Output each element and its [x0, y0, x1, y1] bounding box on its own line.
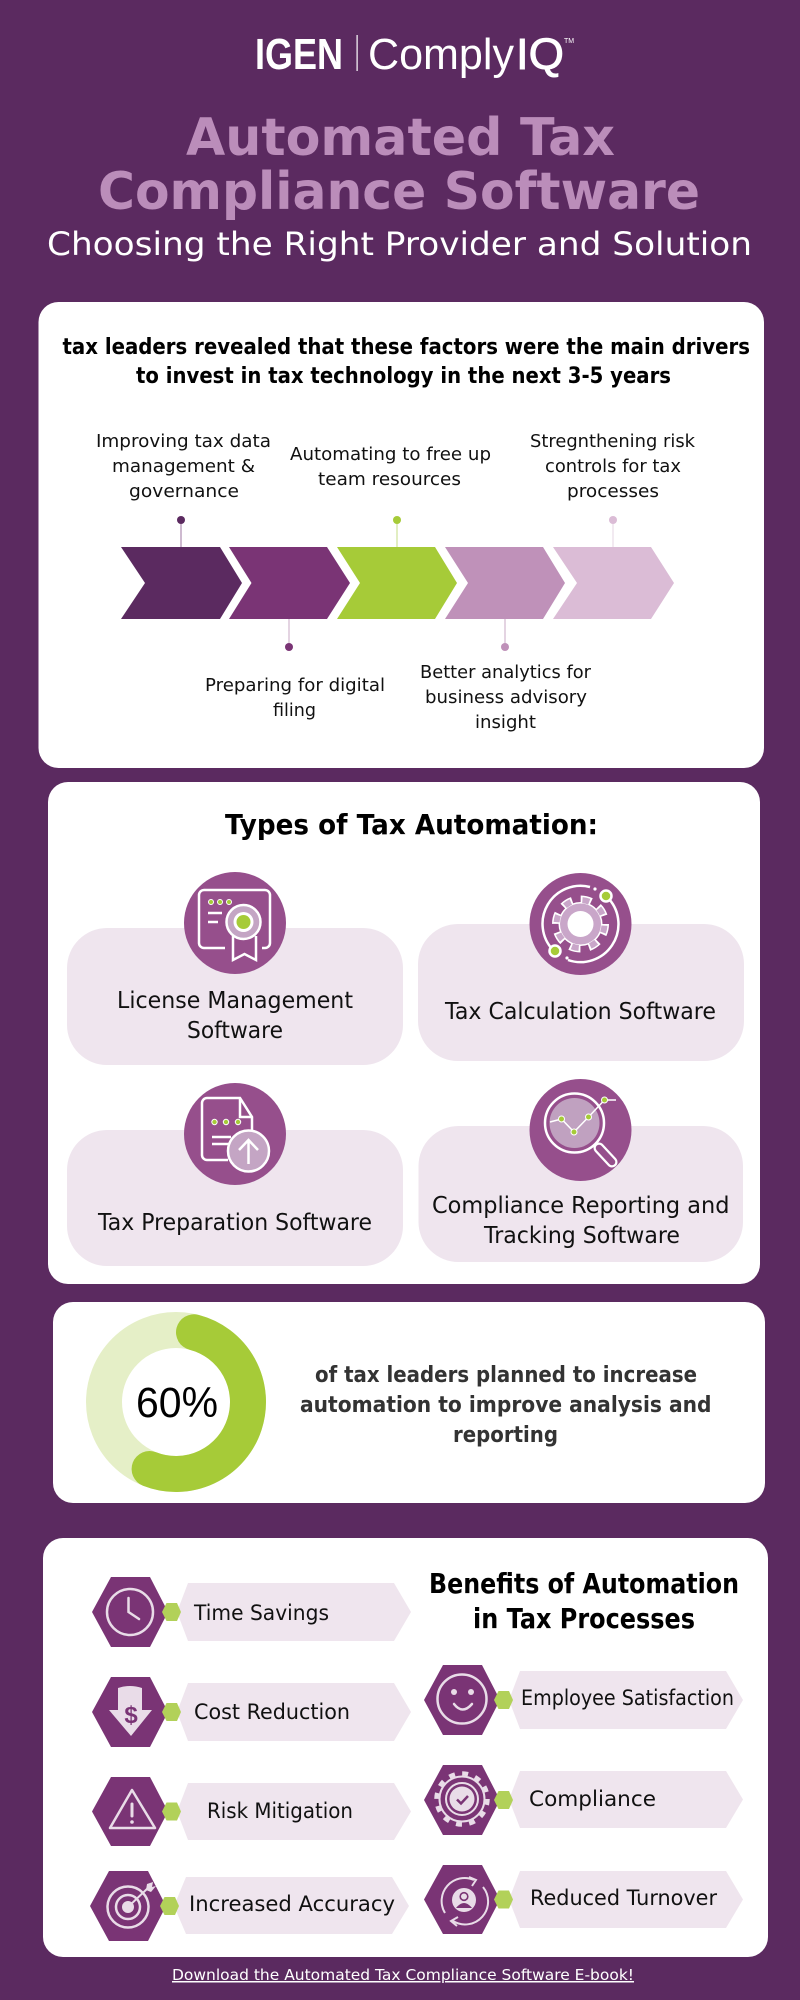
heading: drivers: to invest in tax technology in the next 3-5 years — [136, 363, 671, 389]
benefit: compliance: Compliance — [529, 1787, 656, 1811]
benefit: risk mitigation: Risk Mitigation — [207, 1799, 353, 1823]
label: analytics: insight — [475, 712, 536, 733]
panel: types of tax automation — [48, 782, 760, 1284]
card: compliance reporting — [418, 1126, 743, 1262]
card: compliance reporting: Tracking Software — [483, 1223, 680, 1249]
heading: benefits: Benefits of Automation — [429, 1568, 739, 1600]
card: tax calculation: Tax Calculation Software — [444, 999, 716, 1025]
panel: 60 percent stat — [53, 1302, 765, 1503]
label: risk controls: Stregnthening risk — [530, 431, 696, 452]
heading: drivers — [62, 334, 750, 389]
subtitle: Choosing the Right Provider and Solution — [47, 225, 752, 263]
logo: IGEN ComplyIQ — [255, 30, 574, 79]
card: tax calculation — [418, 924, 744, 1061]
benefit: cost reduction: Cost Reduction — [194, 1700, 350, 1724]
heading: benefits: in Tax Processes — [473, 1603, 695, 1635]
label: tax data management: Improving tax data — [96, 431, 271, 452]
label: digital filing: Preparing for digital — [205, 675, 385, 696]
logo: IGEN ComplyIQ: IQ — [516, 30, 564, 79]
benefit: cost reduction — [92, 1677, 411, 1747]
stat text — [300, 1363, 712, 1448]
benefit: increased accuracy — [90, 1871, 409, 1941]
panel: benefits — [43, 1538, 768, 1957]
benefit: time savings: Time Savings — [193, 1601, 329, 1625]
label: tax data management: governance — [129, 481, 239, 502]
label: analytics — [420, 662, 592, 733]
stat text: reporting — [453, 1423, 558, 1448]
label: analytics: business advisory — [425, 687, 587, 708]
logo: IGEN ComplyIQ: TM — [564, 38, 574, 45]
stat text: of tax leaders planned to increase — [315, 1363, 697, 1388]
card: compliance reporting: Compliance Reporting and — [432, 1193, 730, 1219]
chevron arrows — [121, 547, 674, 619]
card: license management — [67, 928, 403, 1065]
title — [98, 108, 700, 222]
label: digital filing — [205, 675, 385, 721]
benefit: cost reduction: $ — [124, 1702, 138, 1729]
connector: dots and lines — [177, 516, 617, 651]
heading: types: Types of Tax Automation: — [225, 809, 598, 841]
label: risk controls — [530, 431, 696, 502]
label: automating: team resources — [318, 469, 461, 490]
card: tax preparation — [67, 1130, 403, 1266]
label: automating: Automating to free up — [290, 444, 491, 465]
stat text: automation to improve analysis and — [300, 1393, 712, 1418]
card: tax preparation: Tax Preparation Software — [97, 1210, 372, 1236]
label: risk controls: processes — [567, 481, 659, 502]
logo: IGEN ComplyIQ: IGEN — [255, 30, 343, 79]
benefit: time savings — [92, 1577, 411, 1647]
benefit: employee satisfaction: Employee Satisfaction — [521, 1686, 734, 1710]
benefit: employee satisfaction — [424, 1665, 743, 1735]
label: risk controls: controls for tax — [545, 456, 681, 477]
footer link: Download the Automated Tax Compliance Software E-book! — [172, 1966, 634, 1984]
benefit: compliance — [424, 1765, 743, 1835]
label: digital filing: filing — [273, 700, 316, 721]
icon: magnifier chart — [530, 1079, 632, 1181]
icon: document upload — [184, 1083, 286, 1185]
benefit: reduced turnover — [424, 1865, 743, 1934]
icon: license certificate — [184, 872, 286, 974]
benefit: risk mitigation — [92, 1777, 411, 1846]
donut chart: 60% — [104, 1330, 248, 1474]
benefit: reduced turnover: Reduced Turnover — [530, 1886, 717, 1910]
icon: gear calculation — [530, 873, 632, 975]
card: license management: License Management — [117, 988, 353, 1014]
label: tax data management — [96, 431, 271, 502]
title: Compliance Software — [98, 162, 700, 222]
donut chart: 60%: 60% — [136, 1379, 218, 1427]
label: automating — [290, 444, 491, 490]
panel: drivers — [38, 302, 764, 768]
label: analytics: Better analytics for — [420, 662, 592, 683]
title: Automated Tax — [186, 108, 615, 168]
logo: IGEN ComplyIQ: Comply — [368, 30, 514, 79]
heading: benefits — [429, 1568, 739, 1635]
card: license management: Software — [187, 1018, 283, 1044]
label: tax data management: management & — [112, 456, 255, 477]
benefit: increased accuracy: Increased Accuracy — [189, 1892, 395, 1916]
